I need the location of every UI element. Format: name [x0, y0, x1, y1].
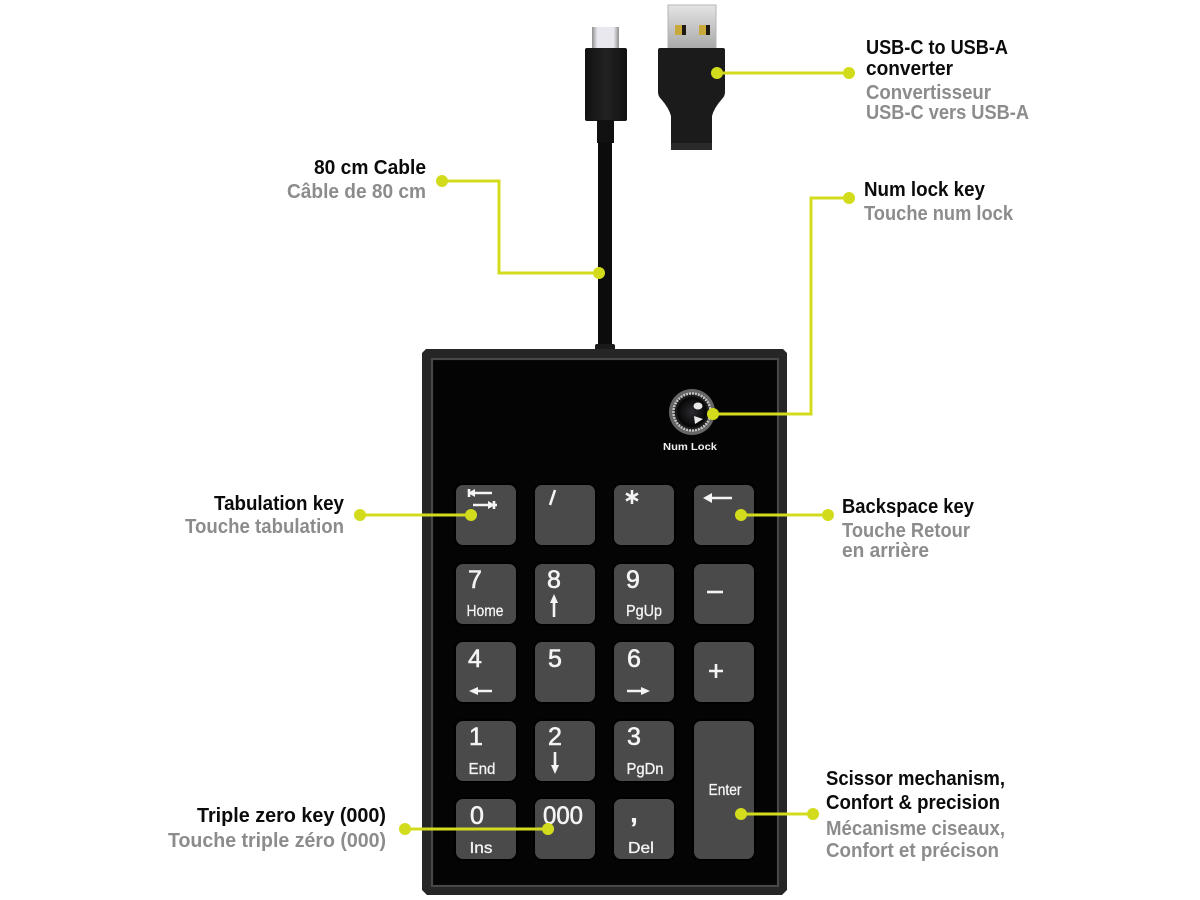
callout: scissor mechanism: Confort et précison: [826, 840, 999, 862]
key row 1: [455, 484, 755, 546]
callout: 80 cm cable: [287, 157, 605, 279]
key row 5: [455, 798, 675, 860]
callout: tabulation key: [185, 493, 477, 538]
key row 4: 3: [627, 723, 641, 751]
callout: triple zero key: Touche triple zéro (000): [168, 830, 386, 852]
key row 4: 2: [548, 723, 562, 751]
callout: num lock key: [707, 179, 1014, 420]
callout: USB-C to USB-A converter: Convertisseur: [866, 82, 991, 104]
callout: num lock key: Touche num lock: [864, 203, 1014, 225]
callout: 80 cm cable: Câble de 80 cm: [287, 181, 426, 203]
callout: USB-C to USB-A converter: converter: [866, 58, 953, 80]
keypad body: [422, 349, 787, 895]
callout: tabulation key: Tabulation key: [214, 493, 345, 515]
key row 4: 1: [469, 723, 483, 751]
callout: USB-C to USB-A converter: [711, 37, 1029, 124]
callout: backspace key: Backspace key: [842, 496, 975, 518]
key row 2: [455, 563, 755, 625]
callout: triple zero key: [168, 805, 554, 852]
callout: backspace key: Touche Retour: [842, 520, 970, 542]
key row 5: ,: [631, 800, 637, 828]
key row 5: Del: [628, 840, 654, 857]
callout: triple zero key: Triple zero key (000): [197, 805, 386, 827]
key row 2: Home: [466, 603, 504, 620]
callout: scissor mechanism: [735, 768, 1005, 862]
callout: num lock key: Num lock key: [864, 179, 986, 201]
callout: backspace key: en arrière: [842, 540, 929, 562]
key row 3: 5: [548, 645, 562, 673]
num lock key: [663, 389, 717, 453]
key row 3: 6: [627, 645, 641, 673]
callout: scissor mechanism: Scissor mechanism,: [826, 768, 1005, 790]
num lock key: Num Lock: [663, 441, 717, 453]
key row 2: 8: [547, 566, 561, 594]
key row 2: 9: [626, 566, 640, 594]
callout: tabulation key: Touche tabulation: [185, 516, 344, 538]
callout: scissor mechanism: Confort & precision: [826, 792, 1000, 814]
key row 4: End: [468, 761, 496, 778]
key row 5: Ins: [470, 840, 492, 857]
key row 3: [455, 641, 755, 703]
enter key: Enter: [708, 782, 742, 799]
key row 3: 4: [468, 645, 482, 673]
callout: USB-C to USB-A converter: USB-C vers USB-A: [866, 102, 1029, 124]
enter key: [693, 720, 755, 860]
key row 5: 0: [470, 802, 484, 830]
callout: scissor mechanism: Mécanisme ciseaux,: [826, 818, 1005, 840]
key row 4: PgDn: [626, 761, 664, 778]
callout: 80 cm cable: 80 cm Cable: [314, 157, 426, 179]
key row 4: [455, 720, 675, 782]
USB-A converter: [658, 5, 725, 150]
callout: backspace key: [735, 496, 975, 562]
key row 5: 000: [543, 802, 583, 830]
key row 2: 7: [468, 566, 482, 594]
callout: USB-C to USB-A converter: USB-C to USB-A: [866, 37, 1008, 59]
USB-C cable with connector: [585, 27, 627, 351]
key row 2: PgUp: [626, 603, 662, 620]
